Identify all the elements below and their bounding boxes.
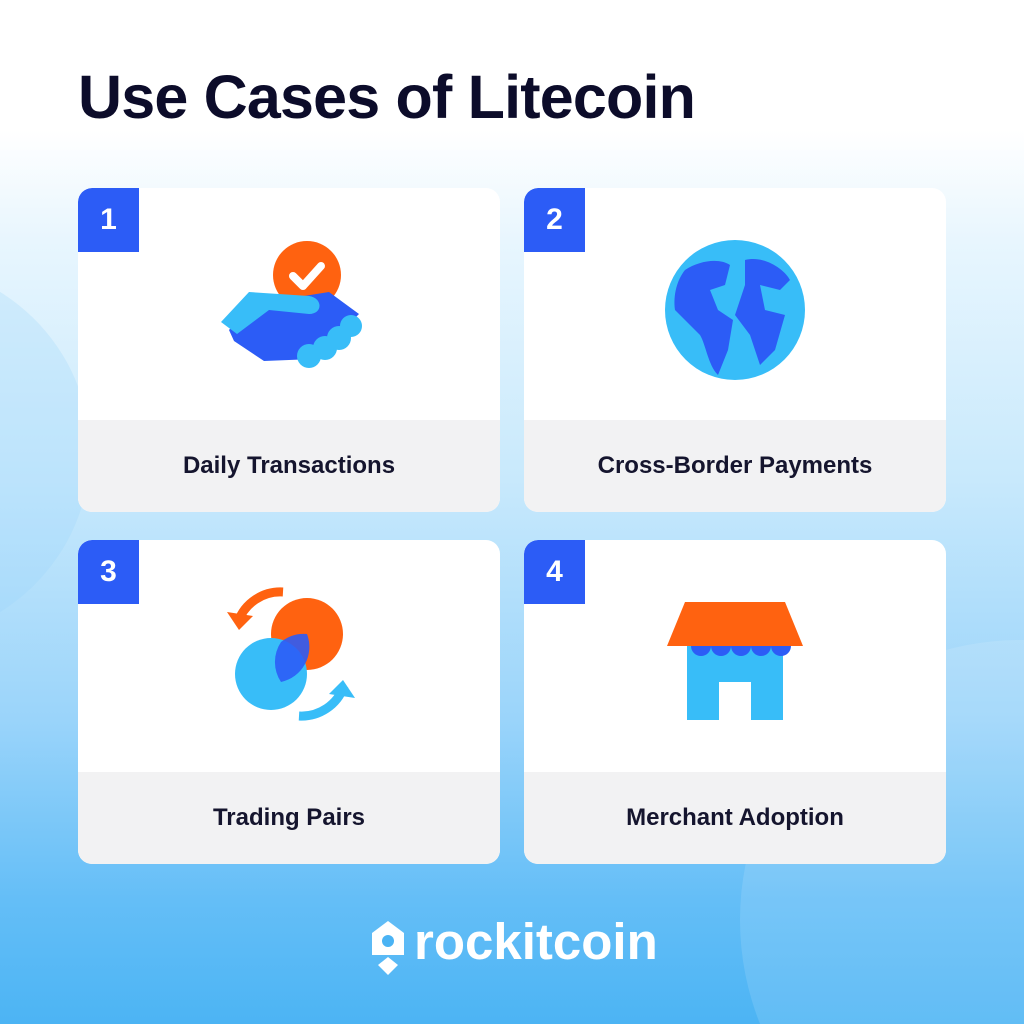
icon: exchange circles	[227, 587, 355, 721]
badge 2: 2	[546, 203, 563, 236]
label	[524, 420, 946, 512]
badge 3: 3	[100, 555, 117, 588]
label	[524, 772, 946, 864]
label	[78, 772, 500, 864]
icon: rocket mark	[372, 921, 404, 975]
label: Trading Pairs	[213, 804, 365, 831]
badge 4	[524, 540, 585, 604]
label	[78, 420, 500, 512]
badge 1	[78, 188, 139, 252]
icon: handshake	[221, 241, 362, 368]
panel: daily transactions	[78, 188, 500, 512]
label: Daily Transactions	[183, 452, 395, 479]
label: Merchant Adoption	[626, 804, 844, 831]
icon: store	[667, 602, 803, 720]
panel: cross-border	[524, 188, 946, 512]
badge 3	[78, 540, 139, 604]
logo: rockitcoin: rockitcoin	[414, 913, 658, 970]
icon: globe	[665, 240, 805, 380]
panel: trading pairs	[78, 540, 500, 864]
label: Cross-Border Payments	[598, 452, 872, 479]
badge 4: 4	[546, 555, 563, 588]
badge 2	[524, 188, 585, 252]
title: Use Cases of Litecoin	[78, 63, 695, 131]
panel: merchant adoption	[524, 540, 946, 864]
badge 1: 1	[100, 203, 117, 236]
